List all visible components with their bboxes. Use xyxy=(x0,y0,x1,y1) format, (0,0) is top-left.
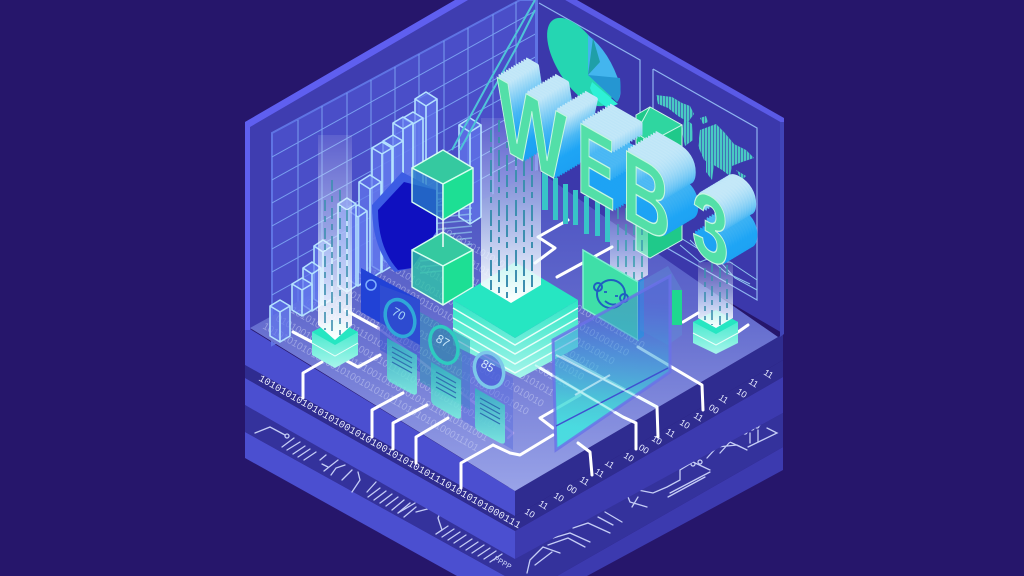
gauge 70 percent xyxy=(380,295,420,341)
top layer sides xyxy=(245,326,783,516)
left wall grid panel xyxy=(272,0,537,345)
right binary row: 00 xyxy=(707,402,721,416)
letter B: B xyxy=(634,119,683,258)
letter B xyxy=(622,108,700,266)
floor with binary texture xyxy=(250,170,778,491)
letter E: E xyxy=(577,99,615,233)
green and grey panels right of the monkey xyxy=(640,266,682,345)
right binary row: 11 xyxy=(593,466,606,480)
right wall xyxy=(534,0,784,337)
numeral 3: 3 xyxy=(712,155,749,279)
floor with binary texture: 0100101010100101001011010101010010101010010 xyxy=(334,281,546,410)
right binary row: 11 xyxy=(664,426,677,440)
numeral 3: 3 xyxy=(722,149,759,273)
letter B: B xyxy=(652,108,700,248)
floor with binary texture: 101001010101010100101010010101010010101010 xyxy=(438,225,647,352)
letter W: W xyxy=(520,42,590,194)
right binary row xyxy=(523,367,775,520)
right binary row: 11 xyxy=(578,474,591,488)
floor with binary texture: 010101001010110010101010101010010101001010 xyxy=(364,265,571,391)
floor with binary texture: 1010101001010100101010101001011010100101010 xyxy=(318,289,531,418)
letter W: W xyxy=(510,48,580,200)
map panel frame xyxy=(653,69,757,300)
floor with binary texture: 0101001010111010100101010010101001010101001 xyxy=(304,297,515,426)
letter B: B xyxy=(642,114,690,254)
central stacked platform xyxy=(453,262,578,378)
letter E: E xyxy=(597,87,635,221)
letter W: W xyxy=(502,53,572,204)
pie panel frame xyxy=(539,3,640,210)
gauge 87 percent xyxy=(425,323,463,367)
floor with binary texture: 101010101001010010101011010100101010101010 xyxy=(378,257,586,383)
numeral 3: 3 xyxy=(720,151,756,274)
right binary row: 10 xyxy=(523,506,537,520)
right binary row: 00 xyxy=(637,442,651,456)
line chart under map xyxy=(676,235,757,290)
upper green cube xyxy=(412,150,473,220)
right binary row: 11 xyxy=(762,367,775,381)
numeral 3: 3 xyxy=(717,152,754,276)
right binary row: 11 xyxy=(717,392,730,406)
left binary row: 1010101010101010010101001010101011101010101000111 xyxy=(256,374,522,532)
right binary row: 00 xyxy=(565,482,579,496)
lower green cube xyxy=(412,220,473,305)
bottom layer: circuit board xyxy=(245,405,783,576)
letter E: E xyxy=(590,91,628,225)
letter B: B xyxy=(627,123,675,263)
monkey NFT panel xyxy=(583,250,644,340)
numeral 3: 3 xyxy=(707,158,744,282)
shield xyxy=(372,172,436,272)
letter E: E xyxy=(582,96,620,230)
letter W: W xyxy=(497,56,567,207)
letter B: B xyxy=(647,111,695,251)
central light tower xyxy=(481,118,541,303)
letter E: E xyxy=(604,82,643,216)
letter B: B xyxy=(632,120,680,260)
hatched bars behind the cubes xyxy=(420,190,472,273)
letters WEB 3 xyxy=(497,38,759,291)
green box behind letter B xyxy=(636,107,682,258)
floor circuit lines xyxy=(293,220,748,488)
letter W: W xyxy=(500,54,570,206)
letter W: W xyxy=(522,41,592,192)
letter W: W xyxy=(524,39,595,191)
letter B: B xyxy=(640,116,688,255)
numeral 3: 3 xyxy=(694,166,731,289)
gauge 85 percent: 85 xyxy=(478,356,497,375)
world map xyxy=(656,95,754,180)
right binary row: 10 xyxy=(735,386,749,400)
floor with binary texture: 101010010101001010101001010101010100101011 xyxy=(348,273,556,399)
circuit traces xyxy=(255,424,777,573)
right light tower and base xyxy=(693,262,738,354)
numeral 3: 3 xyxy=(710,157,746,280)
numeral 3: 3 xyxy=(697,164,734,288)
letter B: B xyxy=(637,117,685,257)
letter E xyxy=(577,81,645,233)
letter E: E xyxy=(580,97,618,231)
right binary row: 10 xyxy=(552,490,566,504)
glass panel xyxy=(535,276,670,450)
floor with binary texture: 101010101010100101001010101110101010100011101 xyxy=(260,321,481,454)
gauge 70 percent: 70 xyxy=(390,304,408,323)
letter W: W xyxy=(527,38,597,189)
left wall xyxy=(245,0,537,345)
numeral 3: 3 xyxy=(700,163,736,286)
floor with binary texture: 1010100101010100101011101010010101010010101 xyxy=(288,305,500,434)
floor with binary texture: 010100101010100101010010101010110101001010 xyxy=(424,233,631,359)
right binary row: 11 xyxy=(747,376,760,390)
letter E: E xyxy=(594,88,633,222)
letter E: E xyxy=(602,84,640,218)
left light tower and base xyxy=(312,135,358,368)
floor with binary texture: 010010101010010101010010101010010101010101 xyxy=(394,249,602,376)
letter E: E xyxy=(600,85,638,219)
floor with binary texture: 101010010101010010101010101001010101010010 xyxy=(408,241,617,368)
pie chart xyxy=(534,7,626,117)
letter B: B xyxy=(644,113,693,252)
right binary row: 11 xyxy=(603,457,616,471)
right binary row: 10 xyxy=(678,417,692,431)
document 1 xyxy=(387,338,417,395)
floor with binary texture: 01010010101011001010010100101010110010101001 xyxy=(274,313,490,444)
right binary row: 11 xyxy=(692,410,705,424)
numeral 3: 3 xyxy=(704,160,741,283)
letter W: W xyxy=(504,51,575,203)
letter W: W xyxy=(507,50,577,201)
numeral 3: 3 xyxy=(702,161,739,285)
gauge 87 percent: 87 xyxy=(434,331,452,350)
numeral 3 xyxy=(692,149,759,291)
middle layer: binary xyxy=(245,360,783,559)
right binary row: 10 xyxy=(650,433,664,447)
blue dashboard card xyxy=(361,268,513,450)
component pads: PPPP xyxy=(492,555,513,572)
right binary row: 10 xyxy=(622,450,636,464)
bar chart on the left wall xyxy=(270,92,481,342)
middle light tower xyxy=(610,205,648,285)
letter B: B xyxy=(622,126,670,266)
right binary row: 11 xyxy=(537,498,550,512)
document 3 xyxy=(475,388,505,444)
letter W: W xyxy=(514,45,585,197)
letter E: E xyxy=(607,81,645,215)
letter W: W xyxy=(517,44,587,195)
letter B: B xyxy=(650,110,698,249)
letter E: E xyxy=(584,94,623,228)
letter B: B xyxy=(624,125,673,264)
numeral 3: 3 xyxy=(714,154,751,277)
gauge 85 percent xyxy=(469,348,509,392)
striped bars behind letters xyxy=(542,172,610,242)
document 2 xyxy=(431,362,461,419)
letter W: W xyxy=(512,47,582,198)
trend line xyxy=(452,0,535,150)
letter E: E xyxy=(592,90,630,224)
numeral 3: 3 xyxy=(692,167,729,291)
letter B: B xyxy=(630,122,678,261)
letter E: E xyxy=(587,93,625,227)
letter W xyxy=(497,38,597,207)
